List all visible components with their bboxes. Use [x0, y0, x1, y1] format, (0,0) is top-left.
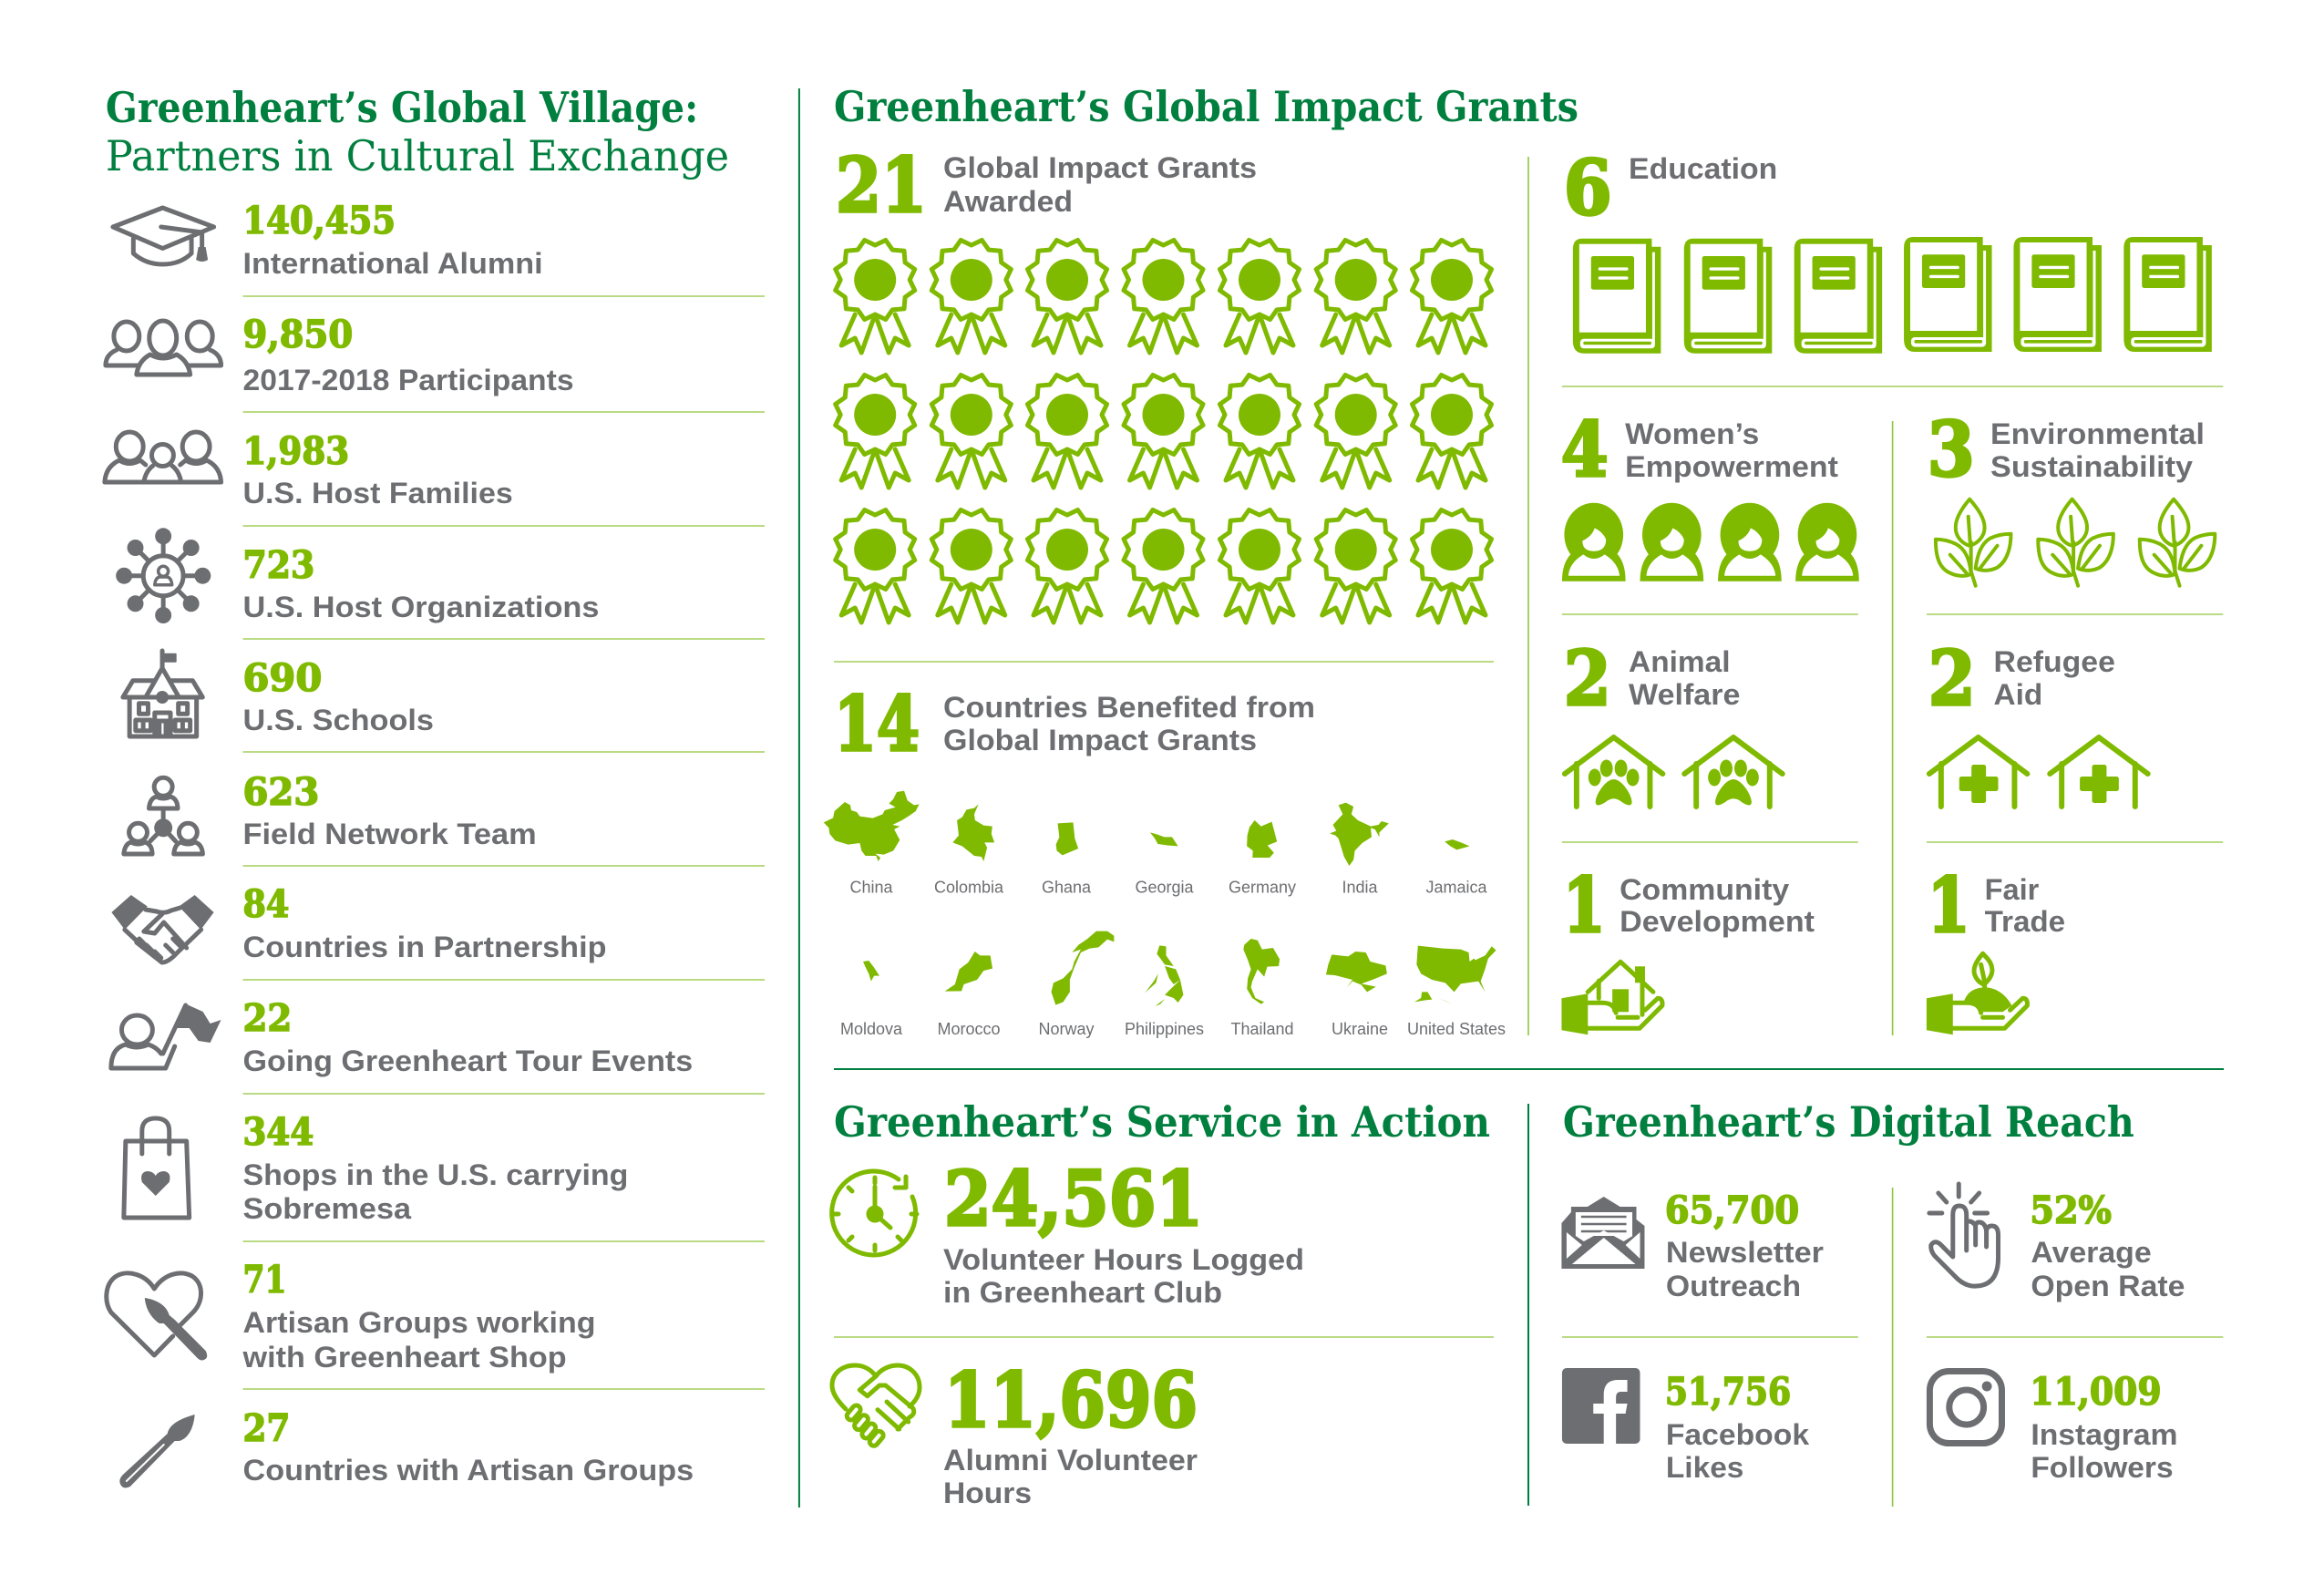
icon: heart with handshake: [832, 1365, 920, 1447]
stat: education: Education: [1629, 152, 1777, 185]
stat: international alumni: 140,455: [243, 199, 396, 242]
icon: person with flag: [111, 1003, 221, 1068]
stat: animal welfare: Welfare: [1629, 678, 1740, 711]
country labels: Jamaica: [1425, 879, 1487, 897]
stat: artisan groups: 71: [243, 1258, 286, 1302]
country labels: [840, 879, 1506, 1038]
heading: global village: Partners in Cultural Exchange: [106, 131, 729, 180]
icon: pointing hand: [1929, 1184, 1999, 1286]
country labels: Philippines: [1125, 1020, 1204, 1038]
stat: instagram: [2030, 1370, 2178, 1484]
country maps: row one: [824, 791, 1470, 866]
stat: newsletter: [1665, 1189, 1824, 1302]
stat: animal welfare: 2: [1564, 635, 1611, 723]
stat: volunteer hours: 24,561: [944, 1156, 1203, 1243]
icon: handshake: [111, 895, 214, 962]
icon: field team: [124, 777, 202, 854]
stat: participants: [243, 313, 574, 396]
stat: 21 grants: Global Impact Grants: [943, 151, 1257, 184]
icon: graduation cap: [113, 208, 214, 264]
stat: host organizations: [243, 543, 599, 623]
stat: community development: Development: [1620, 905, 1815, 938]
stat: open rate: 52%: [2030, 1189, 2112, 1232]
stat: 14 countries: Global Impact Grants: [943, 724, 1257, 756]
country labels: Ukraine: [1332, 1020, 1388, 1038]
stat: fair trade: [1928, 862, 2065, 950]
stat: 14 countries: [834, 681, 1315, 768]
country labels: United States: [1407, 1020, 1506, 1038]
stat: countries in partnership: Countries in Partnership: [243, 931, 606, 963]
country labels: Germany: [1229, 879, 1296, 897]
panel: global village: [105, 83, 799, 1508]
icons: leaves: [1936, 499, 2215, 586]
stat: countries in partnership: 84: [243, 882, 289, 926]
stat: community development: [1563, 862, 1815, 950]
heading: global village: [106, 83, 729, 180]
stat: education: 6: [1564, 145, 1612, 232]
icon: open envelope: [1561, 1197, 1644, 1269]
stat: alumni hours: Alumni Volunteer: [943, 1444, 1198, 1477]
stat: host organizations: 723: [243, 543, 314, 587]
stat: volunteer hours: Volunteer Hours Logged: [943, 1243, 1304, 1276]
stat: volunteer hours: in Greenheart Club: [943, 1276, 1222, 1309]
icon: organization network: [116, 528, 211, 623]
icon: family: [105, 432, 221, 482]
icon: heart with paintbrush: [107, 1273, 207, 1360]
stat: fair trade: 1: [1928, 862, 1970, 950]
heading: global impact grants: Greenheart’s Global Impact Grants: [834, 82, 1578, 131]
stat: tour events: Going Greenheart Tour Events: [243, 1044, 693, 1077]
country labels: Thailand: [1230, 1020, 1294, 1038]
stat: schools: U.S. Schools: [243, 704, 434, 736]
stat: environmental sustainability: 3: [1928, 406, 1975, 494]
country labels: Georgia: [1135, 879, 1195, 897]
stat: tour events: 22: [243, 996, 292, 1040]
stat: 21 grants: 21: [836, 142, 927, 230]
icon: instagram: [1929, 1371, 2002, 1444]
stat: alumni hours: Hours: [943, 1477, 1032, 1509]
stat: environmental sustainability: [1928, 406, 2205, 494]
stat: shops: 344: [243, 1110, 314, 1154]
stat: refugee aid: [1928, 635, 2115, 723]
stat: field network: [243, 770, 537, 850]
stat: artisan groups: Artisan Groups working: [243, 1306, 596, 1339]
stat: 21 grants: [836, 142, 1257, 230]
country labels: Colombia: [934, 879, 1004, 897]
country labels: Morocco: [937, 1020, 1001, 1038]
stat: host families: [243, 429, 513, 509]
stat: facebook: Likes: [1666, 1451, 1743, 1484]
heading: digital reach: Greenheart’s Digital Reach: [1563, 1097, 2134, 1147]
stat: artisan groups: [242, 1258, 596, 1374]
stat: alumni hours: [943, 1357, 1198, 1509]
icon: facebook: [1562, 1368, 1640, 1444]
panel: grant categories: [1561, 145, 2223, 1035]
country labels: India: [1342, 879, 1378, 897]
stat: refugee aid: Aid: [1994, 678, 2042, 711]
stat: newsletter: Outreach: [1666, 1270, 1801, 1302]
stat: fair trade: Fair: [1985, 873, 2039, 906]
icons: medical houses: [1929, 737, 2148, 807]
stat: artisan countries: 27: [243, 1406, 290, 1450]
stat: open rate: Average: [2031, 1236, 2152, 1269]
stat: instagram: Followers: [2031, 1451, 2174, 1484]
stat: 14 countries: 14: [834, 681, 920, 768]
country labels: China: [849, 879, 894, 897]
heading: service in action: Greenheart’s Service in Action: [834, 1097, 1490, 1147]
stat: host families: U.S. Host Families: [243, 477, 513, 509]
stat: schools: 690: [243, 656, 322, 700]
stat: womens empowerment: 4: [1561, 406, 1609, 494]
icon: hand holding seedling: [1927, 953, 2028, 1034]
stat: artisan countries: [243, 1406, 694, 1487]
stat: 21 grants: Awarded: [943, 185, 1073, 218]
stat: facebook: Facebook: [1666, 1418, 1809, 1451]
icons: paw houses: [1565, 737, 1783, 807]
stat: animal welfare: [1564, 635, 1740, 723]
stat: tour events: [243, 996, 693, 1077]
stat: schools: [243, 656, 434, 736]
stat: newsletter: 65,700: [1665, 1189, 1799, 1232]
stat: participants: 2017-2018 Participants: [243, 364, 574, 396]
stat: community development: 1: [1563, 862, 1606, 950]
stat: artisan groups: with Greenheart Shop: [242, 1341, 567, 1374]
stat: womens empowerment: Empowerment: [1625, 450, 1838, 483]
stat: newsletter: Newsletter: [1666, 1236, 1824, 1269]
panel: digital reach: [1561, 1097, 2223, 1507]
country labels: Norway: [1038, 1020, 1095, 1038]
stat: environmental sustainability: Environmental: [1990, 417, 2205, 450]
stat: education: [1564, 145, 1777, 232]
icons: women: [1562, 503, 1859, 581]
stat: field network: Field Network Team: [243, 818, 537, 850]
stat: host organizations: U.S. Host Organizations: [243, 591, 599, 623]
icon: shopping bag with heart: [124, 1118, 190, 1218]
stat: shops: Sobremesa: [243, 1192, 411, 1225]
stat: countries in partnership: [243, 882, 606, 963]
country labels: Ghana: [1042, 879, 1092, 897]
icons: books: [1573, 237, 2212, 354]
stat: animal welfare: Animal: [1629, 645, 1731, 678]
stat: community development: Community: [1620, 873, 1789, 906]
heading: global village: Greenheart’s Global Village:: [106, 83, 698, 132]
stat: facebook: 51,756: [1665, 1370, 1791, 1414]
icon: hand holding house: [1561, 962, 1662, 1034]
icon: clock: [832, 1171, 917, 1255]
stat: shops: [243, 1110, 628, 1225]
country labels: Moldova: [840, 1020, 903, 1038]
icon: school: [123, 651, 202, 736]
stat: field network: 623: [243, 770, 319, 814]
stat: international alumni: International Alumni: [243, 247, 543, 280]
stat: womens empowerment: Women’s: [1625, 417, 1759, 450]
stat: fair trade: Trade: [1985, 905, 2065, 938]
icon: paintbrush: [119, 1415, 195, 1487]
icon: three people: [106, 321, 221, 375]
stat: instagram: Instagram: [2031, 1418, 2178, 1451]
stat: host families: 1,983: [243, 429, 349, 473]
stat: environmental sustainability: Sustainability: [1990, 450, 2193, 483]
stat: artisan countries: Countries with Artisan Groups: [243, 1454, 694, 1487]
icon grid: award rosettes: [836, 241, 1491, 623]
country maps: row two: [863, 931, 1496, 1006]
stat: open rate: Open Rate: [2031, 1270, 2185, 1302]
stat: 14 countries: Countries Benefited from: [943, 691, 1315, 724]
stat: alumni hours: 11,696: [944, 1357, 1198, 1445]
stat: womens empowerment: [1561, 406, 1838, 494]
stat: open rate: [2030, 1189, 2185, 1302]
stat: volunteer hours: [943, 1156, 1304, 1309]
stat: instagram: 11,009: [2030, 1370, 2162, 1414]
stat: participants: 9,850: [243, 313, 353, 356]
stat: facebook: [1665, 1370, 1809, 1484]
stat: shops: Shops in the U.S. carrying: [243, 1158, 628, 1191]
stat: international alumni: [243, 199, 543, 280]
panel: global impact grants: [824, 82, 1578, 1038]
panel: service in action: [832, 1097, 1494, 1509]
stat: refugee aid: 2: [1928, 635, 1976, 723]
stat: refugee aid: Refugee: [1994, 645, 2115, 678]
